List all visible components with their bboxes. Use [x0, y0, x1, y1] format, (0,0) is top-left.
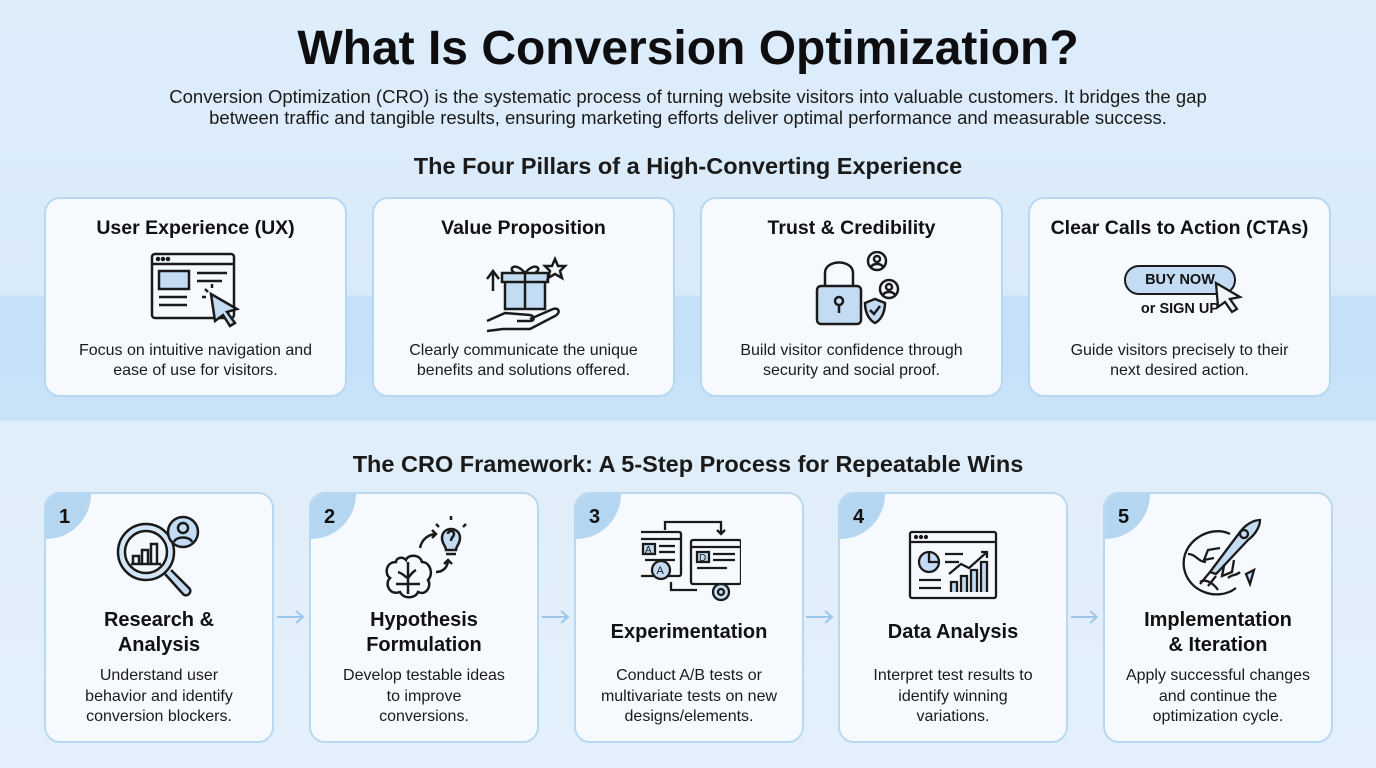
panel: step 1: conversion blockers.: [86, 708, 232, 725]
arrow: [277, 610, 304, 624]
panel: step 1: [44, 492, 274, 743]
panel: step 2: 2: [324, 506, 335, 528]
panel: value proposition: Clearly communicate the unique: [409, 342, 638, 359]
panel: step 3: Conduct A/B tests or: [616, 667, 762, 684]
subtitle: [169, 86, 1207, 128]
panel: step 5: Implementation: [1144, 609, 1292, 631]
panel: step 4: identify winning: [898, 688, 1008, 704]
panel: trust: security and social proof.: [763, 362, 940, 379]
panel: user experience: ease of use for visitors.: [113, 362, 278, 379]
icon: A/B windows: D: [699, 553, 706, 564]
panel: step 3: 3: [589, 506, 600, 528]
panel: trust: Build visitor confidence through: [740, 342, 963, 359]
panel: step 2: Hypothesis: [370, 609, 478, 631]
panel: value proposition: benefits and solutions offered.: [417, 362, 630, 379]
panel: step 2: conversions.: [379, 708, 469, 725]
heading: framework: The CRO Framework: A 5-Step Process for Repeatable Wins: [353, 451, 1023, 477]
panel: step 4: 4: [853, 506, 864, 528]
panel: step 3: designs/elements.: [625, 708, 753, 725]
panel: value proposition: [372, 197, 675, 397]
panel: CTAs: [1028, 197, 1331, 397]
panel: step 5: optimization cycle.: [1153, 708, 1283, 725]
panel: CTAs: next desired action.: [1110, 362, 1249, 379]
panel: CTAs: Guide visitors precisely to their: [1071, 342, 1288, 359]
panel: step 2: Formulation: [366, 634, 482, 656]
panel: step 1: Understand user: [100, 667, 218, 684]
icon: magnifier chart: [116, 516, 200, 597]
icon: rocket globe: [1182, 518, 1262, 596]
panel: step 4: Interpret test results to: [873, 667, 1033, 684]
panel: step 3: multivariate tests on new: [601, 688, 777, 704]
panel: CTAs: or SIGN UP: [1141, 301, 1219, 317]
panel: trust: Trust & Credibility: [768, 217, 935, 239]
panel: step 2: to improve: [387, 688, 461, 704]
panel: step 5: and continue the: [1159, 688, 1277, 704]
panel: user experience: User Experience (UX): [96, 217, 295, 239]
panel: user experience: Focus on intuitive navigation and: [79, 342, 312, 359]
arrow: [806, 610, 834, 624]
panel: step 1: 1: [59, 506, 70, 528]
heading: four pillars: The Four Pillars of a High-Converting Experience: [414, 153, 962, 179]
icon: gift hand: [486, 256, 568, 332]
subtitle: between traffic and tangible results, ensuring marketing efforts deliver optimal performance and measurable success.: [209, 107, 1167, 128]
panel: step 4: Data Analysis: [888, 621, 1018, 643]
panel: step 5: [1103, 492, 1333, 743]
panel: value proposition: Value Proposition: [441, 217, 606, 239]
panel: step 4: variations.: [917, 708, 989, 725]
subtitle: Conversion Optimization (CRO) is the systematic process of turning website visitors into valuable customers. It bridges the gap: [169, 86, 1207, 107]
icon: A/B windows: A: [645, 545, 652, 556]
panel: step 5: Apply successful changes: [1126, 667, 1310, 684]
panel: step 2: [309, 492, 539, 743]
panel: step 1: Research &: [104, 609, 214, 631]
arrow: [1071, 610, 1098, 624]
panel: step 3: [574, 492, 804, 743]
icon: brain bulb: [385, 516, 467, 598]
icon: buy now button: BUY NOW: [1145, 272, 1215, 288]
icon: padlock shield: [816, 251, 900, 326]
panel: step 1: behavior and identify: [85, 688, 233, 704]
icon: buy now button: [1124, 265, 1236, 295]
icon: browser cursor: [150, 252, 240, 328]
icon: A/B windows: A: [656, 565, 664, 577]
icon: A/B windows: [641, 520, 741, 602]
panel: step 1: Analysis: [118, 634, 200, 656]
icon: dashboard: [908, 530, 998, 600]
panel: step 2: Develop testable ideas: [343, 667, 505, 684]
panel: step 5: & Iteration: [1169, 634, 1267, 656]
panel: trust: [700, 197, 1003, 397]
panel: user experience: [44, 197, 347, 397]
title: What Is Conversion Optimization?: [297, 22, 1079, 75]
panel: step 3: Experimentation: [611, 621, 767, 643]
panel: step 5: 5: [1118, 506, 1129, 528]
panel: step 4: [838, 492, 1068, 743]
panel: CTAs: Clear Calls to Action (CTAs): [1051, 217, 1308, 239]
arrow: [542, 610, 570, 624]
